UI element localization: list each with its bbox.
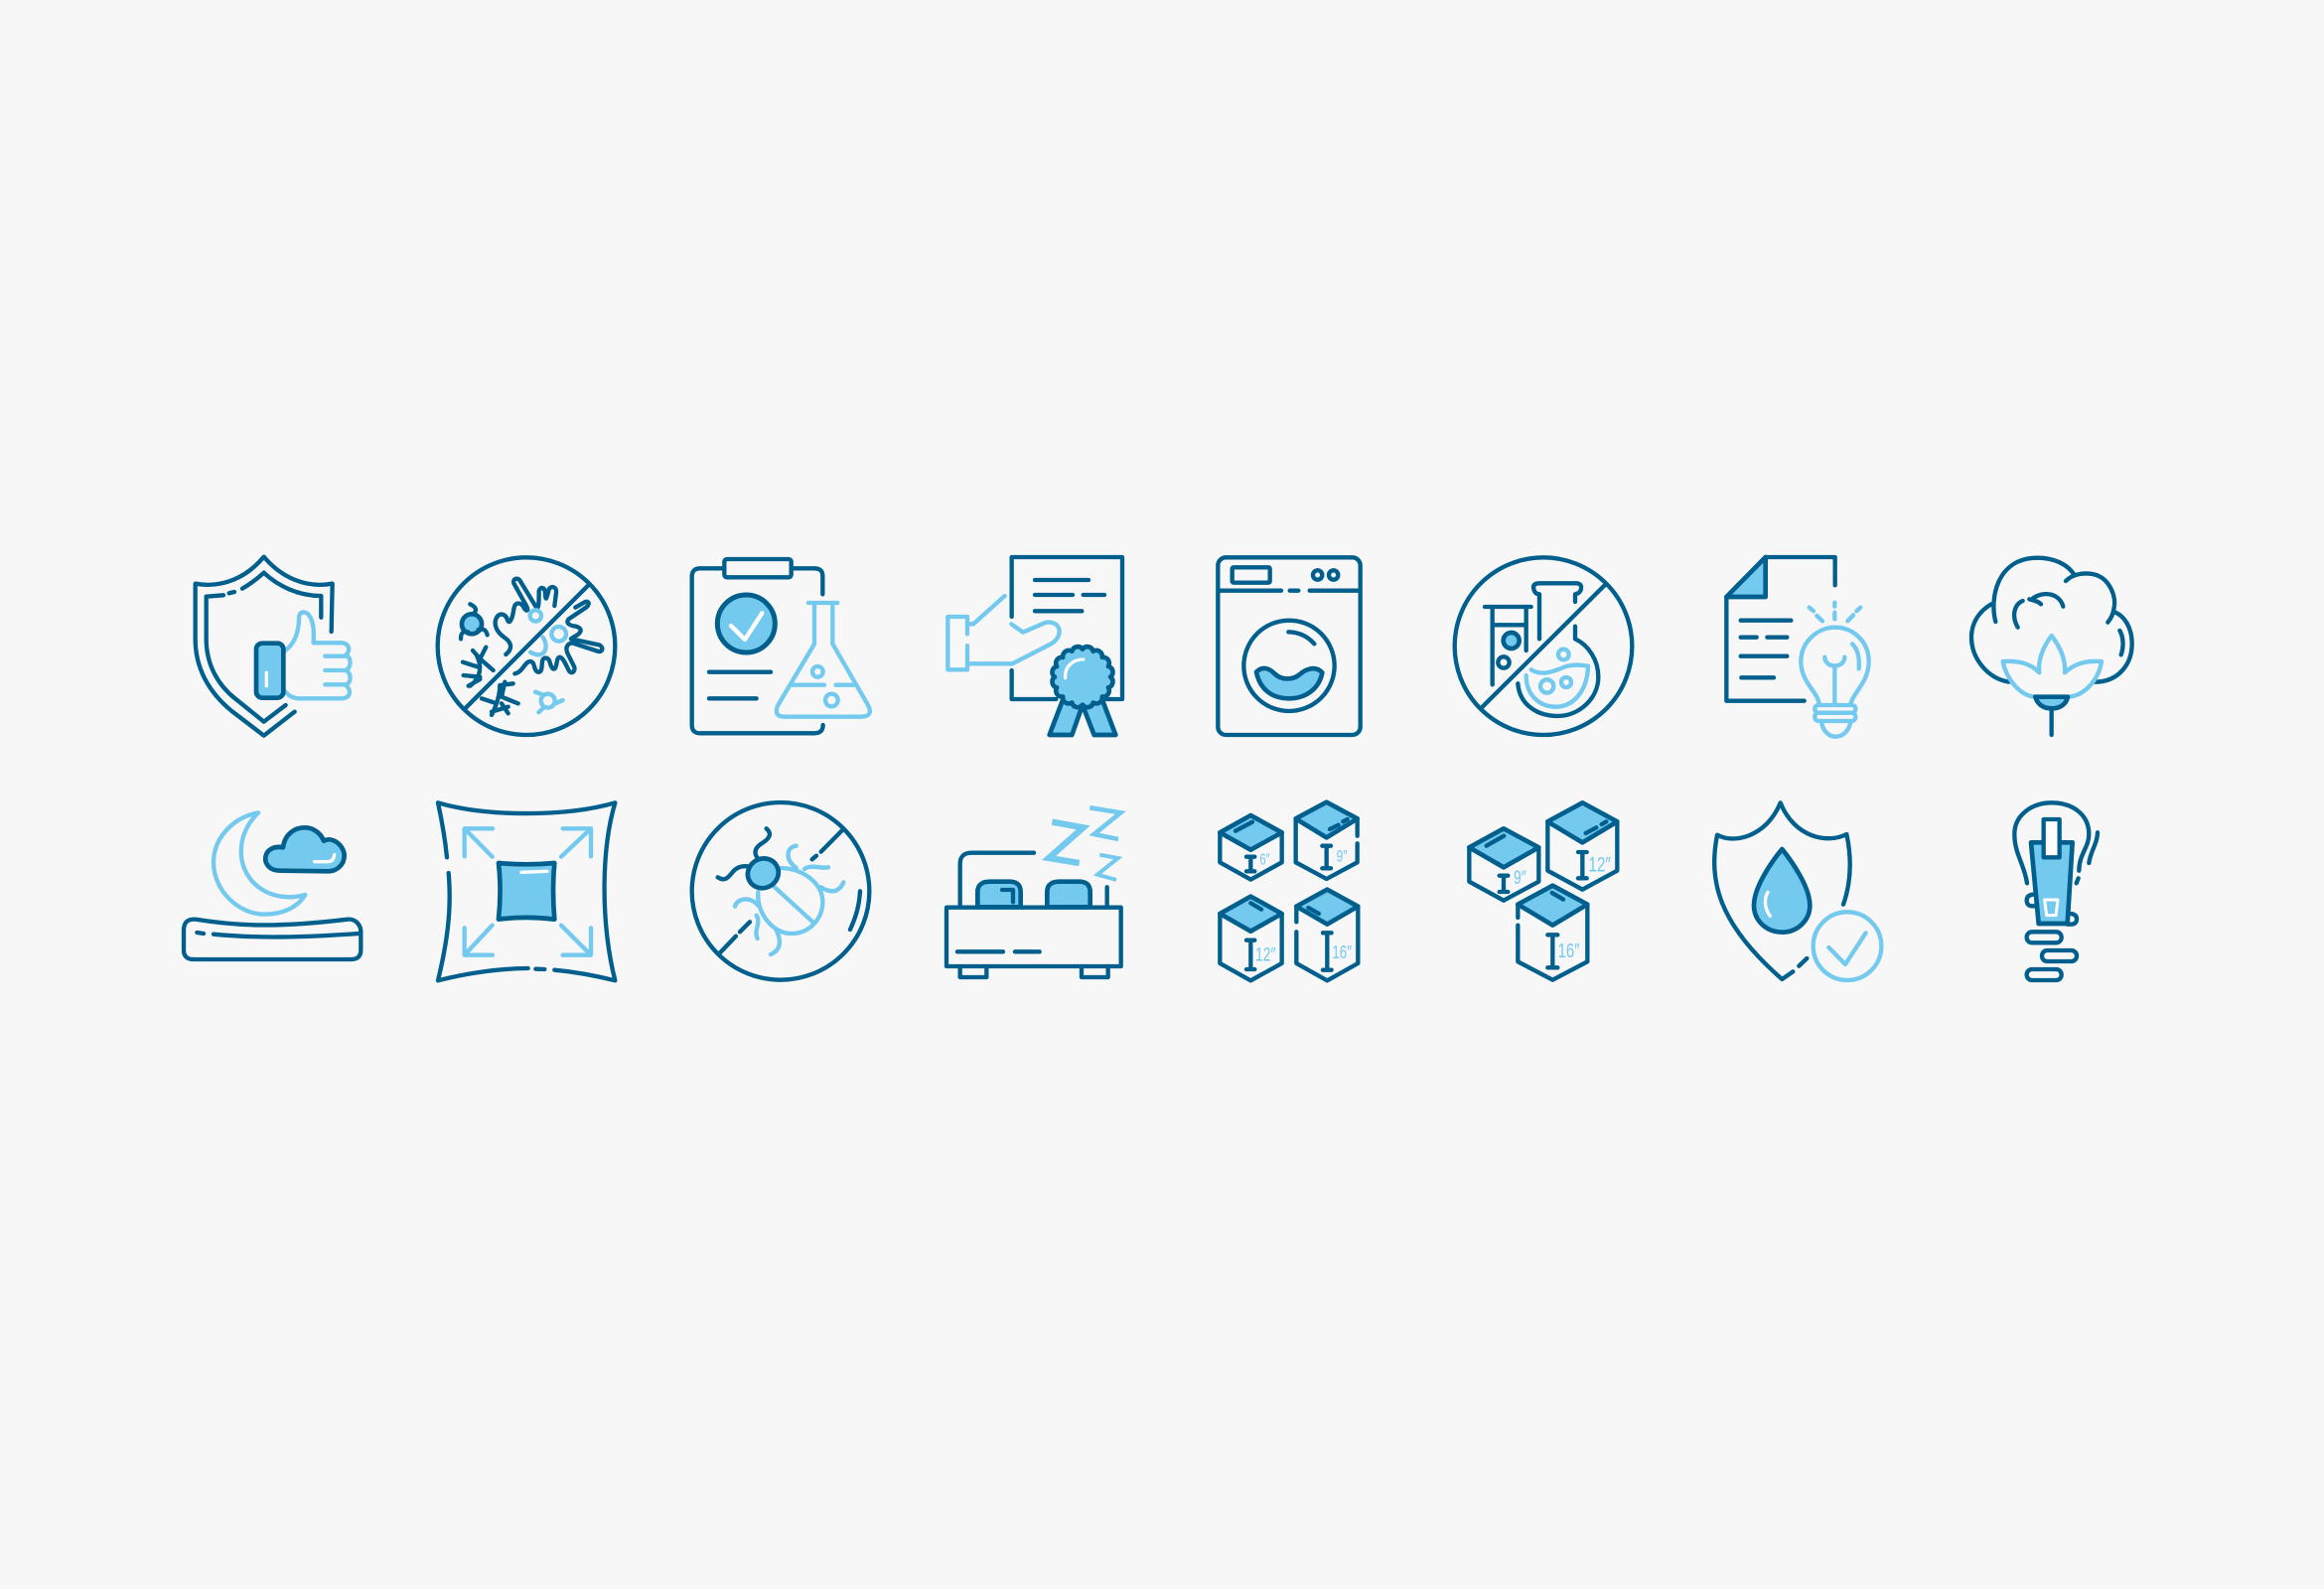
icon: mattress with moon and cloud — [184, 812, 361, 959]
cube: 12 inch — [1547, 802, 1617, 890]
icon: expanding pillow — [438, 802, 615, 980]
icon: waterproof shield with check — [1714, 802, 1881, 980]
icon: document with light bulb — [1726, 557, 1869, 737]
cube: 16 inch: 16″ — [1558, 939, 1580, 962]
icon: no bed bugs — [692, 802, 869, 980]
icon: no germs — [438, 557, 615, 735]
icon: cotton flower — [1971, 558, 2132, 735]
cube: 16 inch — [1296, 890, 1358, 980]
icon: washing machine — [1218, 557, 1361, 735]
cube: 16 inch: 16″ — [1332, 942, 1352, 963]
cube: 6 inch: 6″ — [1259, 851, 1270, 868]
cube: 9 inch: 9″ — [1337, 848, 1348, 866]
icon: clipboard with lab flask — [692, 559, 870, 733]
icon: no chemicals — [1455, 557, 1632, 735]
icon: three mattress thickness cubes — [1469, 802, 1617, 980]
cube: 16 inch — [1518, 886, 1587, 980]
icon: four mattress thickness cubes — [1220, 802, 1358, 980]
cube: 9 inch — [1296, 802, 1358, 879]
cube: 12 inch: 12″ — [1588, 852, 1611, 876]
cube: 9 inch — [1469, 828, 1538, 901]
icon: zipper — [2014, 802, 2098, 980]
cube: 9 inch: 9″ — [1514, 867, 1526, 889]
cube: 6 inch — [1220, 815, 1282, 880]
icon: certificate in hand — [947, 557, 1122, 735]
cube: 12 inch: 12″ — [1255, 943, 1275, 965]
icon: bed with sleep Z letters — [946, 807, 1121, 977]
icon: shield with thumbs up — [196, 557, 351, 736]
cube: 12 inch — [1220, 897, 1282, 980]
